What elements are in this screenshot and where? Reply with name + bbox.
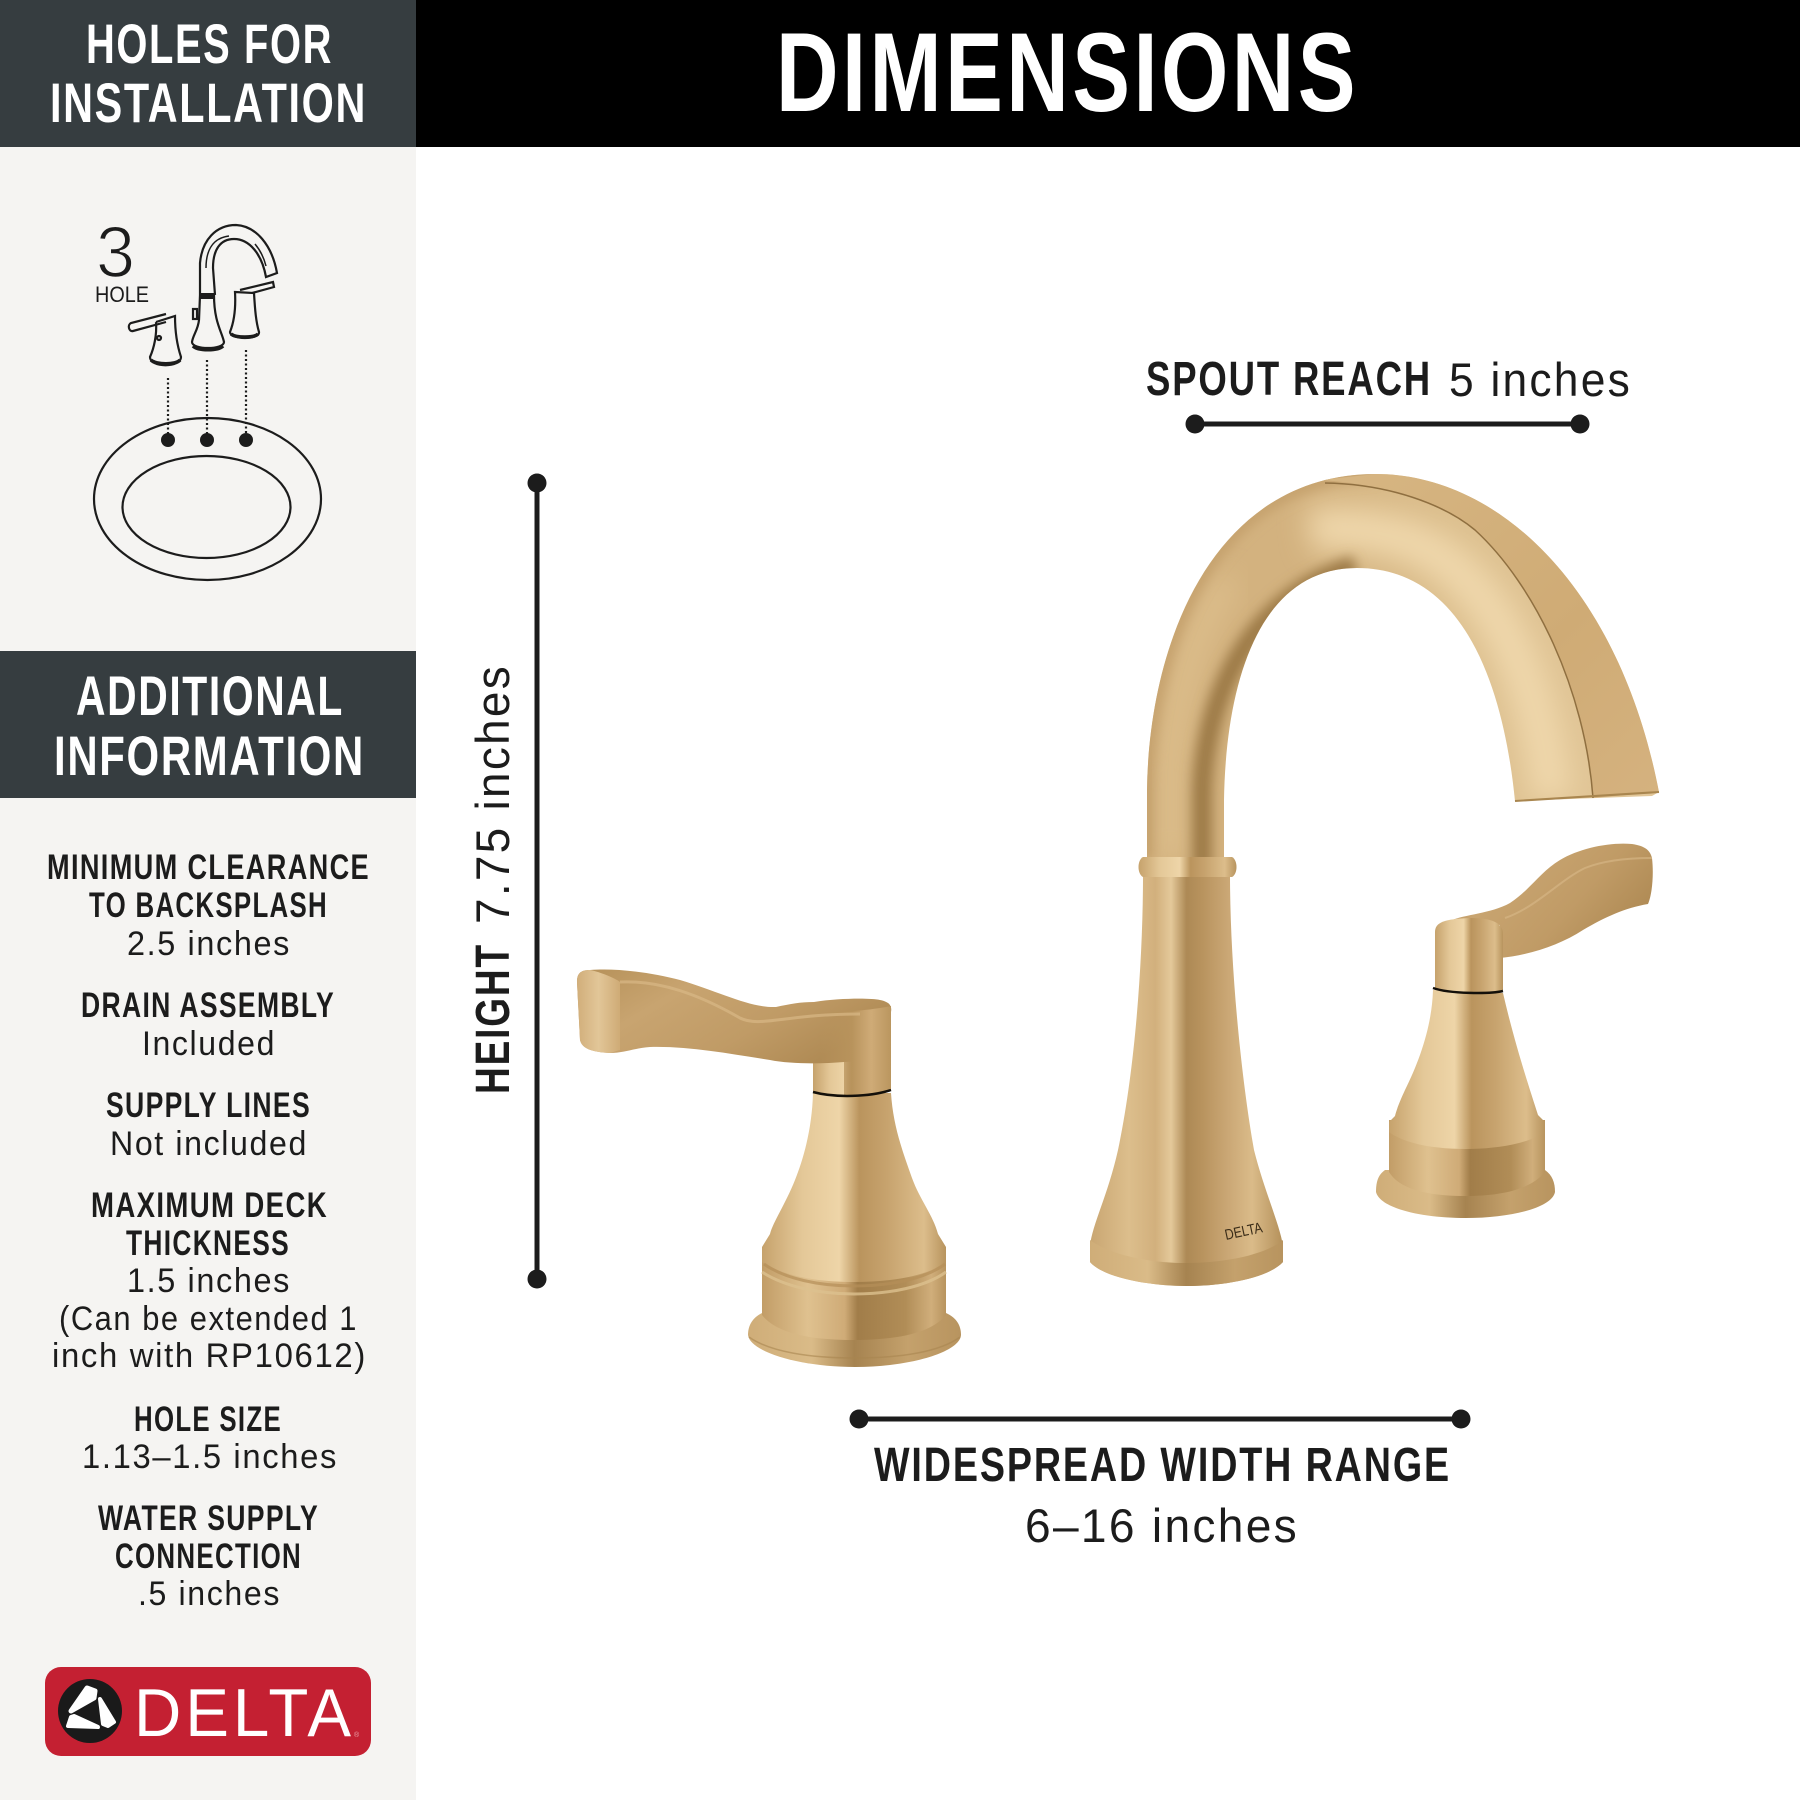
text block: maximum deck thickness [52,1186,367,1375]
text block: water supply connection [98,1499,319,1613]
icon: three hole faucet and basin [94,213,321,580]
heading: holes for installation: INSTALLATION [50,71,367,134]
text block: maximum deck thickness: 1.5 inches [127,1262,291,1300]
foot [748,1313,961,1367]
title: dimensions: DIMENSIONS [776,10,1359,135]
faucet: left handle [577,969,961,1367]
icon: right handle [230,282,274,338]
logo: delta: DELTA [134,1675,355,1751]
foot [1376,1170,1555,1218]
body below collar [1090,875,1283,1286]
text block: drain assembly: Included [142,1025,276,1063]
lever [1450,844,1653,958]
text block: maximum deck thickness: MAXIMUM DECK [91,1186,328,1225]
lever [577,969,891,1063]
label: 3 hole [95,213,149,307]
cone [1389,990,1545,1149]
cylinder [762,1247,946,1340]
text block: supply lines [106,1086,311,1163]
icon: faucet spout [192,225,277,350]
text block: minimum clearance: MINIMUM CLEARANCE [47,848,370,887]
black ring [1433,988,1503,993]
text block: supply lines: Not included [110,1125,308,1163]
heading: additional information [0,651,416,798]
heading: holes for installation [0,0,416,147]
column [1435,918,1503,992]
text block: minimum clearance [47,848,370,963]
dimension: spout reach [1146,353,1632,434]
text block: drain assembly [81,986,335,1063]
label: 3 hole: 3 [96,213,135,293]
text block: hole size: HOLE SIZE [134,1400,282,1439]
base lip [1090,1240,1283,1286]
dimension: height [466,474,546,1288]
cone [762,1093,946,1282]
text block: water supply connection: .5 inches [138,1575,281,1613]
logo: delta [45,1667,371,1756]
text block: maximum deck thickness: THICKNESS [126,1224,290,1263]
text block: water supply connection: WATER SUPPLY [98,1499,319,1538]
heading: additional information: ADDITIONAL [76,664,344,727]
panel: left sidebar [0,146,416,1800]
dimension: widespread width range: 6–16 inches [1025,1499,1299,1552]
heading: holes for installation: HOLES FOR [86,12,333,75]
black ring [813,1090,891,1096]
dotted guide lines [168,350,246,440]
dimension: widespread width range [850,1410,1470,1552]
title: dimensions [416,0,1800,147]
heading: additional information: INFORMATION [54,724,365,787]
text block: drain assembly: DRAIN ASSEMBLY [81,986,335,1025]
text block: hole size [82,1400,338,1476]
neck [813,1056,891,1096]
cylinder [1389,1120,1545,1196]
dimension: spout reach: 5 inches [1449,353,1632,406]
text block: maximum deck thickness: (Can be extended 1 [59,1300,358,1338]
dimension: spout reach: SPOUT REACH [1146,353,1432,406]
text block: minimum clearance: 2.5 inches [127,925,291,963]
icon: left handle [129,314,181,365]
text block: water supply connection: CONNECTION [115,1537,302,1576]
text block: minimum clearance: TO BACKSPLASH [89,886,328,925]
dimension: widespread width range: WIDESPREAD WIDTH RANGE [874,1439,1451,1492]
brand mark: DELTA [1223,1219,1264,1244]
faucet: right handle [1376,844,1653,1218]
label: 3 hole: HOLE [95,282,149,307]
logo: delta: ® [354,1731,360,1739]
dimension: height: HEIGHT [467,943,520,1094]
faucet: central spout [1090,474,1659,1286]
lever tip face [577,970,620,1053]
column [820,1006,891,1096]
icon: basin [94,418,321,580]
text block: supply lines: SUPPLY LINES [106,1086,311,1125]
text block: hole size: 1.13–1.5 inches [82,1438,338,1476]
collar [1138,857,1236,877]
text block: maximum deck thickness: inch with RP10612) [52,1337,367,1375]
spout arch [1147,474,1659,870]
dimension: height: 7.75 inches [466,664,519,924]
